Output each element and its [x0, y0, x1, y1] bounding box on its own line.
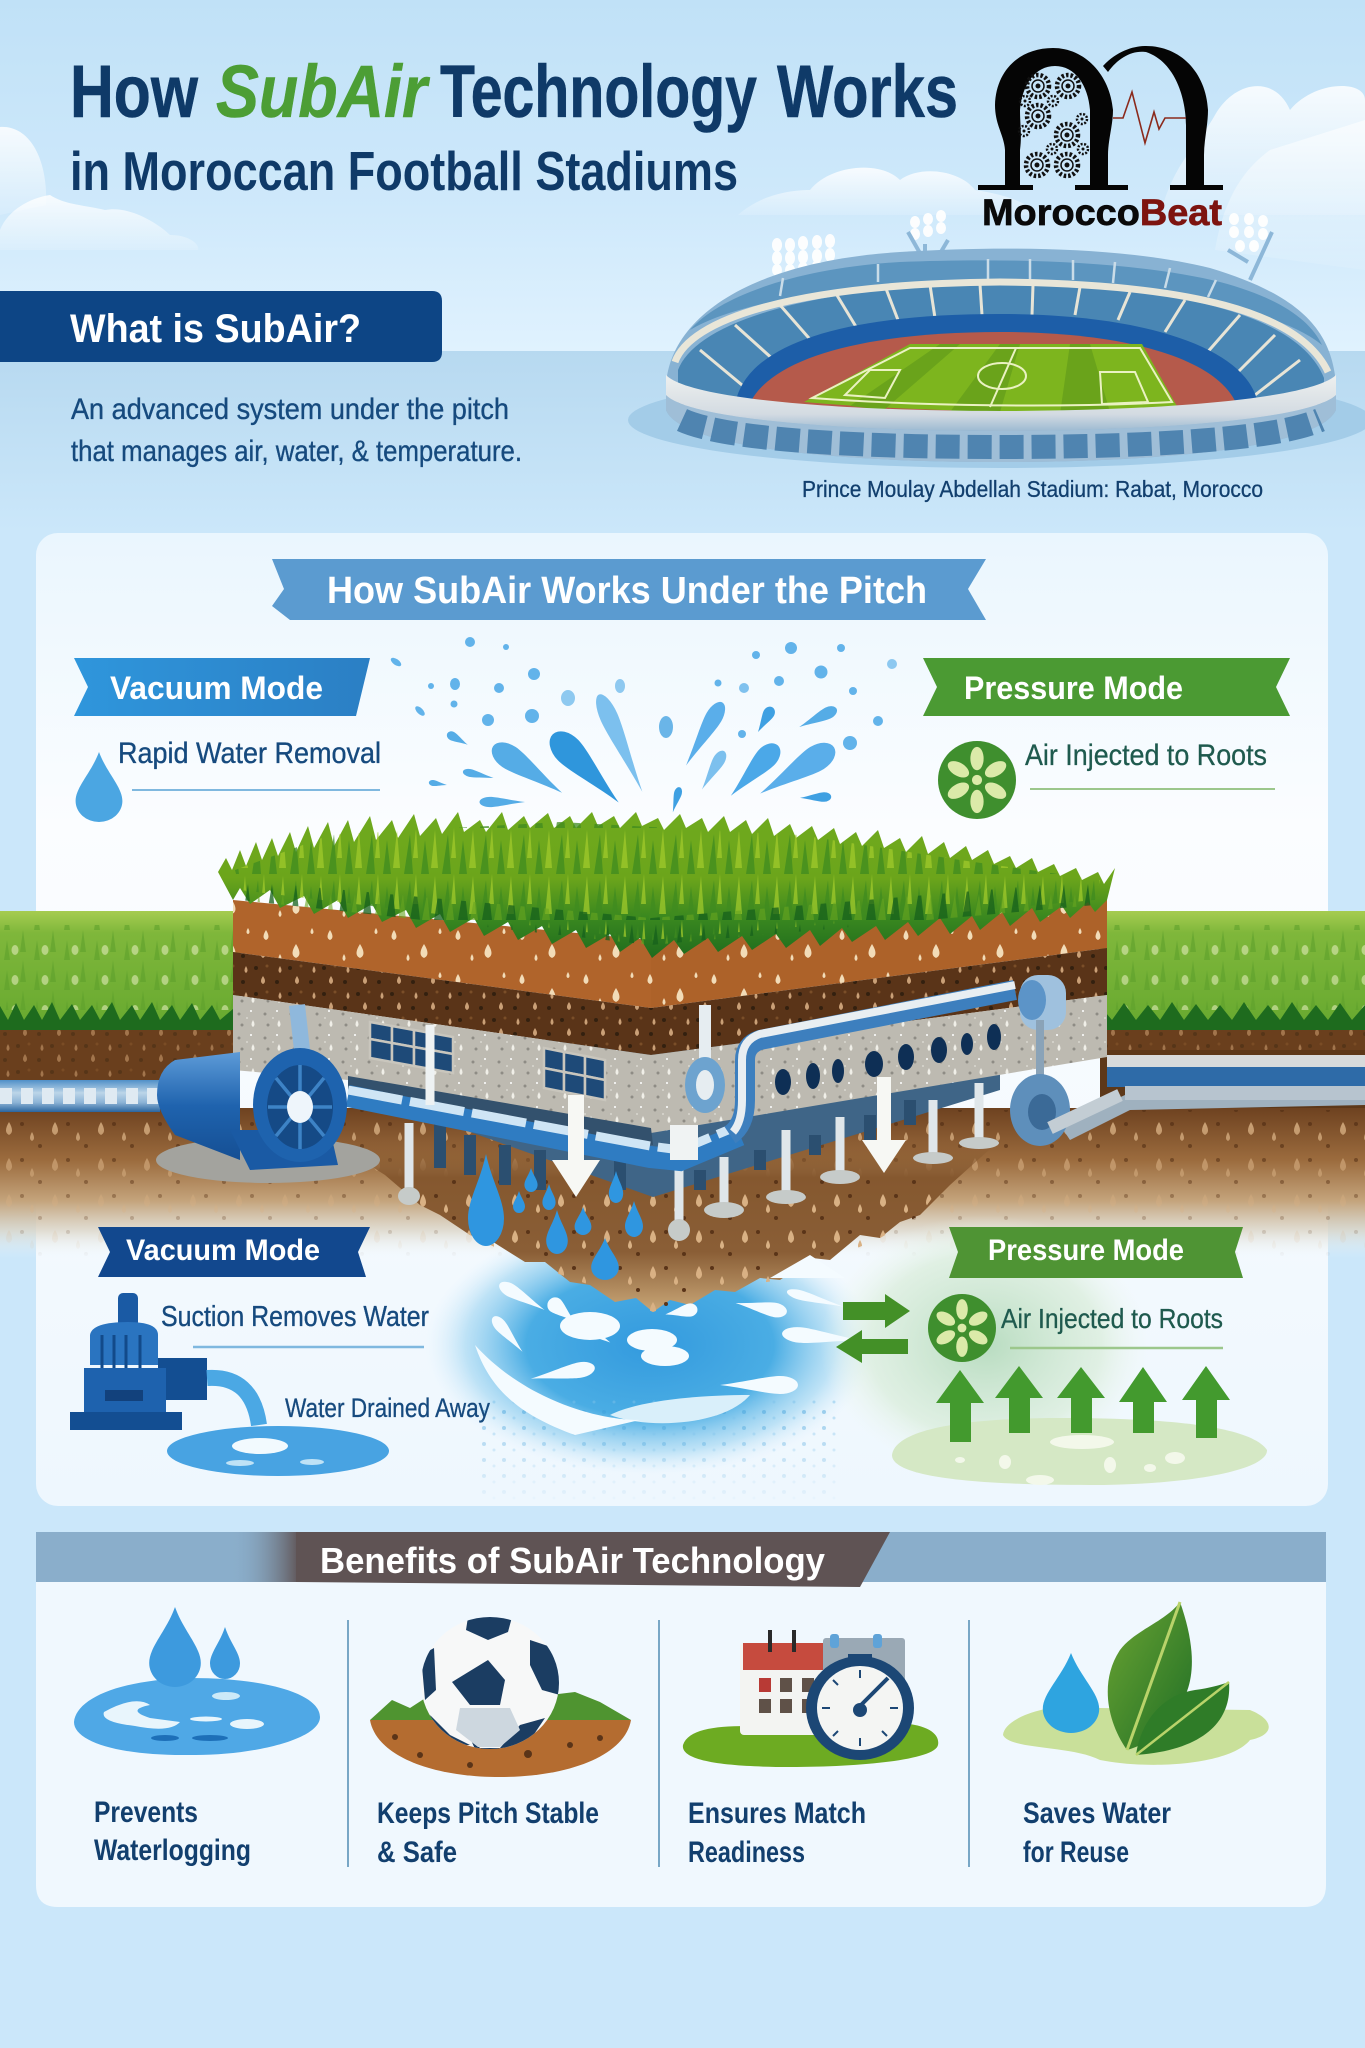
post feet — [398, 1137, 999, 1241]
wheel face — [267, 1065, 333, 1149]
logo heartbeat — [1113, 92, 1186, 143]
exchange arrows — [836, 1294, 910, 1363]
wheel hub — [287, 1091, 313, 1123]
section heading ribbon: How SubAir Works Under the Pitch — [327, 570, 927, 612]
white posts — [409, 1083, 979, 1225]
air injected to roots lower — [928, 1294, 1223, 1362]
water drips — [468, 1154, 643, 1280]
title line 2: in Moroccan Football Stadiums — [70, 140, 738, 202]
orange soil left — [233, 900, 651, 1008]
concrete right — [651, 995, 1107, 1133]
right valve — [1010, 1074, 1070, 1146]
left pipe drop — [297, 1005, 302, 1050]
right wall pipe — [730, 990, 1015, 1135]
section heading ribbon — [272, 559, 986, 620]
motor base — [230, 1130, 338, 1170]
icon: water spout — [207, 1378, 259, 1425]
green air tint — [820, 1215, 1150, 1475]
upper seat dividers — [780, 259, 1216, 297]
air injected to roots lower: Air Injected to Roots — [1001, 1303, 1223, 1334]
left inlet pipe — [0, 1080, 160, 1112]
clouds — [0, 86, 1365, 270]
what is subair badge: What is SubAir? — [70, 307, 361, 351]
football pitch — [804, 344, 1178, 414]
label: prevents waterlogging: Waterlogging — [94, 1834, 251, 1867]
logo gears — [1019, 75, 1088, 176]
title line 1: SubAir — [216, 50, 431, 133]
water flecks — [475, 1255, 860, 1435]
underdrain columns — [440, 1100, 910, 1190]
title line 1: Technology — [440, 50, 757, 133]
dark soil — [233, 948, 1107, 1055]
panel: how subair works — [36, 533, 1328, 1506]
benefit: prevents waterlogging — [74, 1607, 320, 1867]
what is subair description — [71, 393, 522, 468]
green up arrows — [936, 1366, 1230, 1442]
valve stem — [1050, 1095, 1120, 1128]
what is subair description: that manages air, water, & temperature. — [71, 435, 522, 468]
label: ensures match readiness: Ensures Match — [688, 1797, 866, 1830]
grass blade texture — [235, 822, 1100, 940]
stadium caption: Prince Moulay Abdellah Stadium: Rabat, Morocco — [802, 476, 1263, 502]
side ground left — [0, 911, 240, 1085]
rapid water removal — [76, 737, 381, 822]
air injected to roots top — [938, 739, 1275, 819]
centre valve — [685, 1005, 725, 1113]
right face vents — [775, 1024, 1001, 1095]
water speckles — [480, 1400, 840, 1500]
upper seating — [690, 260, 1322, 345]
label: saves water: Saves Water — [1023, 1797, 1171, 1830]
motor wheel — [253, 1048, 347, 1162]
orange soil right — [651, 900, 1107, 1008]
left white pipe — [426, 1025, 434, 1105]
logo arches — [978, 46, 1223, 190]
icon: air fan lower — [928, 1294, 996, 1362]
label: saves water: for Reuse — [1023, 1836, 1129, 1869]
left windows — [370, 1022, 605, 1100]
turf block — [233, 900, 1107, 1241]
turf grass — [218, 812, 1115, 958]
label: prevents waterlogging — [94, 1796, 251, 1867]
stadium lower base — [666, 395, 1336, 462]
vacuum mode top ribbon: Vacuum Mode — [110, 670, 323, 706]
water drained away: Water Drained Away — [285, 1393, 490, 1423]
icon: drained puddle — [167, 1426, 389, 1476]
lower right pipe — [1060, 1095, 1365, 1140]
lower pressure mode ribbon: Pressure Mode — [988, 1234, 1184, 1267]
lower soil band — [0, 1108, 1365, 1260]
title — [70, 50, 958, 202]
air injected to roots top: Air Injected to Roots — [1025, 739, 1267, 772]
lower vacuum mode ribbon — [98, 1227, 370, 1277]
side ground right — [1100, 911, 1365, 1120]
underdrain base — [380, 1040, 1000, 1197]
label: saves water — [1023, 1797, 1171, 1869]
upper right pipe — [1107, 1055, 1365, 1087]
rapid water removal: Rapid Water Removal — [118, 737, 381, 770]
water splash — [389, 637, 897, 813]
benefit dividers — [348, 1620, 969, 1867]
concrete left — [233, 995, 651, 1133]
grey pipe elbow — [348, 1096, 740, 1160]
motor cylinder — [157, 1052, 240, 1160]
grass dark lower blades — [235, 880, 1105, 945]
what is subair badge — [0, 291, 442, 362]
icon: football on soil — [370, 1617, 631, 1777]
lower pressure mode ribbon — [949, 1227, 1243, 1278]
blower motor — [0, 1048, 380, 1183]
seat aisles — [700, 284, 1300, 400]
benefits panel background — [36, 1580, 1326, 1907]
label: keeps pitch stable — [377, 1797, 599, 1869]
logo: MoroccoBeat — [978, 46, 1223, 233]
white down arrows — [552, 1077, 906, 1197]
water body — [438, 1252, 854, 1494]
blue concourse ring — [735, 314, 1258, 405]
soil wedge — [330, 1140, 1000, 1312]
pressure mode top ribbon: Pressure Mode — [964, 670, 1183, 706]
top elbow — [1018, 980, 1046, 1020]
panel: benefits — [36, 1532, 1326, 1907]
icon: calendar and stopwatch — [683, 1630, 938, 1767]
motor concrete pad — [156, 1137, 380, 1183]
icon: drop and leaves — [1003, 1602, 1269, 1765]
right pump and pipes — [1010, 980, 1365, 1146]
stadium body — [666, 249, 1336, 462]
logo wordmark: MoroccoBeat — [982, 192, 1222, 233]
lower seating — [678, 283, 1324, 405]
lower vacuum mode ribbon: Vacuum Mode — [126, 1234, 320, 1267]
label: keeps pitch stable: Keeps Pitch Stable — [377, 1797, 599, 1830]
benefit: ensures match readiness — [683, 1630, 938, 1869]
wheel spokes — [268, 1065, 332, 1149]
label: ensures match readiness: Readiness — [688, 1836, 805, 1869]
vacuum mode top ribbon — [74, 658, 370, 716]
red track — [748, 332, 1238, 421]
title line 1: How — [70, 50, 198, 133]
stadium rim — [666, 375, 1336, 431]
stadium lower columns — [682, 420, 1320, 447]
dark footing band — [348, 1076, 653, 1145]
vertical feed pipe — [1036, 1020, 1044, 1090]
floodlights — [772, 210, 1272, 280]
benefits header bar: Benefits of SubAir Technology — [320, 1540, 825, 1581]
upper seat ring — [675, 282, 1328, 372]
benefit: keeps pitch stable — [370, 1617, 631, 1869]
stadium ground shadow — [628, 372, 1365, 468]
icon: water drop — [76, 752, 122, 822]
pressure mode top ribbon — [923, 658, 1290, 716]
drain connector — [670, 1125, 698, 1160]
suction removes water: Suction Removes Water — [161, 1301, 429, 1333]
label: keeps pitch stable: & Safe — [377, 1836, 457, 1869]
icon: vacuum pump — [70, 1293, 207, 1430]
icon: puddle with drops — [74, 1607, 320, 1755]
label: ensures match readiness — [688, 1797, 866, 1869]
what is subair description: An advanced system under the pitch — [71, 393, 509, 426]
label: prevents waterlogging: Prevents — [94, 1796, 198, 1829]
grey pipe highlight — [348, 1090, 740, 1150]
benefits header bar — [36, 1532, 1326, 1587]
stadium illustration — [628, 210, 1365, 468]
green aerated soil — [892, 1418, 1267, 1485]
valve inner — [1028, 1094, 1056, 1130]
right elbow — [1020, 975, 1066, 1030]
icon: air fan — [938, 741, 1016, 819]
title line 1: Works — [777, 50, 958, 133]
benefit: saves water — [1003, 1602, 1269, 1869]
